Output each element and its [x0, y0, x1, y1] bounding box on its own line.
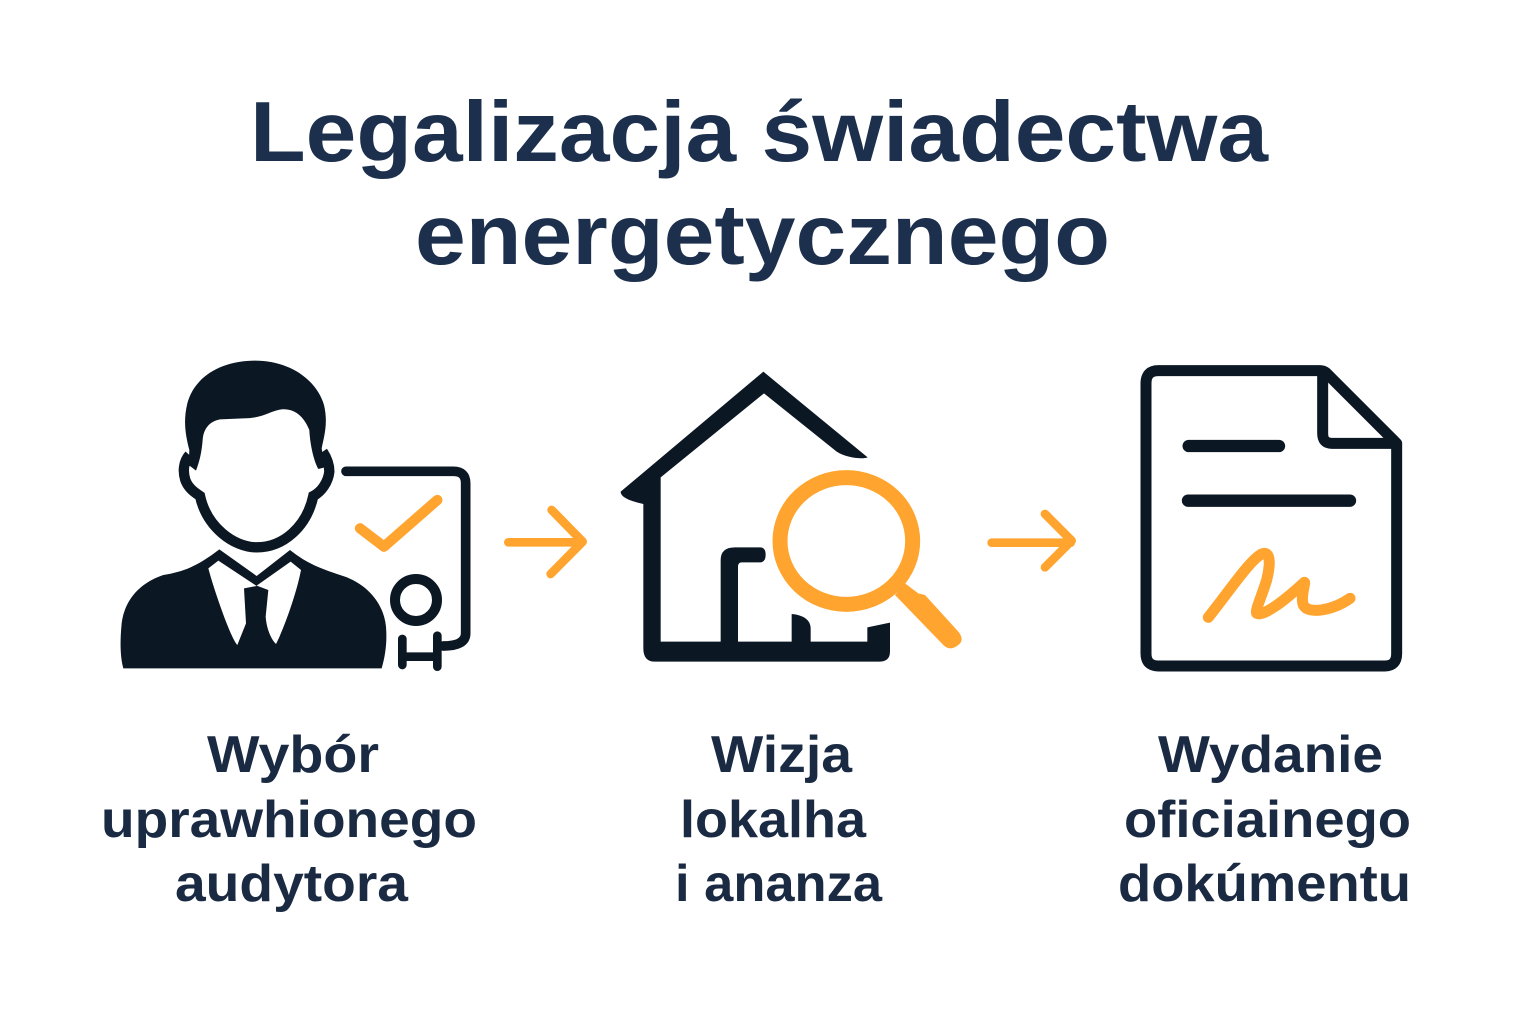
icon: signed document: [1146, 371, 1397, 666]
icon: auditor with certificate: [121, 361, 466, 668]
document fold: [1323, 375, 1397, 443]
certificate frame: [346, 471, 466, 646]
label: step 1: uprawhionego: [101, 791, 477, 849]
house outline: [621, 372, 890, 662]
auditor shirt left: [208, 561, 257, 645]
label: step 2: lokalha: [680, 791, 867, 849]
label: step 2: [675, 726, 883, 913]
check mark: [360, 500, 437, 547]
label: step 3: oficiainego: [1124, 791, 1411, 849]
label: step 2: Wizja: [711, 726, 853, 784]
icon: house with magnifier: [621, 372, 962, 662]
arrow 2: [992, 514, 1072, 567]
label: step 1: audytora: [175, 855, 409, 913]
label: step 3: dokúmentu: [1118, 855, 1411, 913]
label: step 1: Wybór: [207, 726, 379, 784]
magnifier handle: [895, 583, 962, 648]
document outline: [1146, 371, 1397, 666]
label: step 3: [1118, 726, 1411, 913]
auditor shirt right: [257, 562, 301, 644]
magnifier lens: [780, 478, 913, 604]
signature: [1208, 553, 1350, 617]
certificate seal: [395, 579, 437, 621]
auditor hair: [185, 361, 326, 471]
title: energetycznego: [415, 188, 1110, 283]
title: Legalizacja świadectwa: [250, 85, 1269, 180]
arrow 1: [508, 510, 583, 574]
label: step 2: i ananza: [675, 855, 883, 913]
auditor suit: [121, 549, 386, 668]
certificate ribbon: [402, 636, 437, 667]
label: step 1: [101, 726, 477, 913]
auditor face outline: [184, 452, 329, 547]
document text lines: [1188, 446, 1350, 501]
label: step 3: Wydanie: [1158, 726, 1383, 784]
title: [250, 85, 1269, 283]
